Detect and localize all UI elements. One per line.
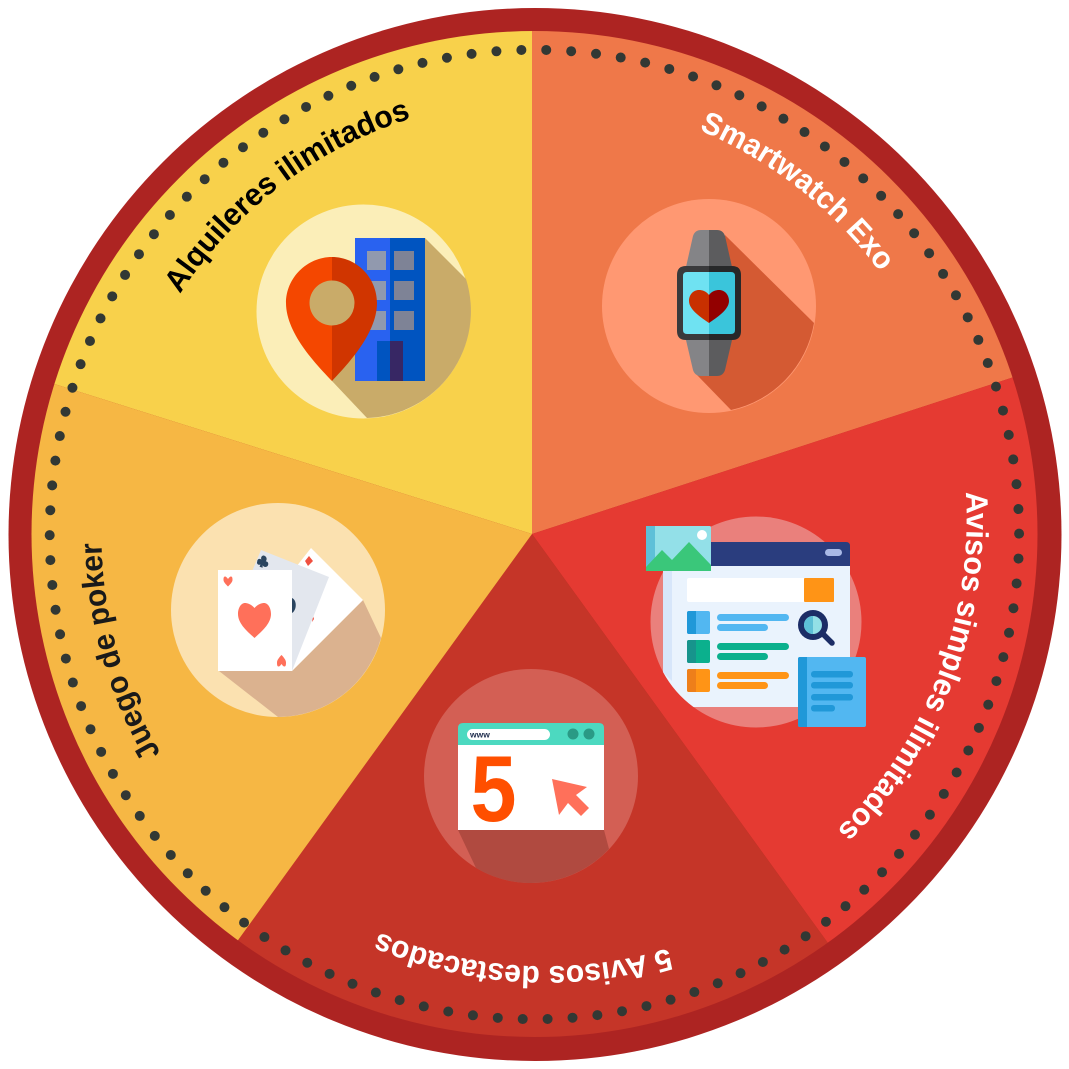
wedge: 5 avisos [238, 534, 828, 1037]
wedge: smartwatch [532, 31, 1012, 534]
icon: browser window with number 5: 5 [470, 736, 516, 841]
icon: smartwatch [602, 199, 816, 413]
wedge: avisos simples [532, 378, 1038, 943]
label: Avisos simples ilimitados: Avisos simples ilimitados [840, 492, 989, 838]
icon: browser window with number 5 [424, 669, 638, 883]
wedge: juego de poker [32, 384, 532, 940]
icon: browser window with number 5: www [469, 730, 490, 740]
label: Smartwatch Exo: Smartwatch Exo [702, 113, 890, 268]
icon: poker cards [171, 503, 385, 717]
label: Alquileres ilimitados: Alquileres ilimitados [167, 104, 409, 294]
icon: map pin and building [256, 204, 471, 418]
label: 5 Avisos destacados: 5 Avisos destacados [376, 934, 672, 988]
label: Juego de poker: Juego de poker [82, 544, 158, 758]
icon: classified listings page [646, 516, 866, 728]
wedge: alquileres [54, 31, 532, 534]
